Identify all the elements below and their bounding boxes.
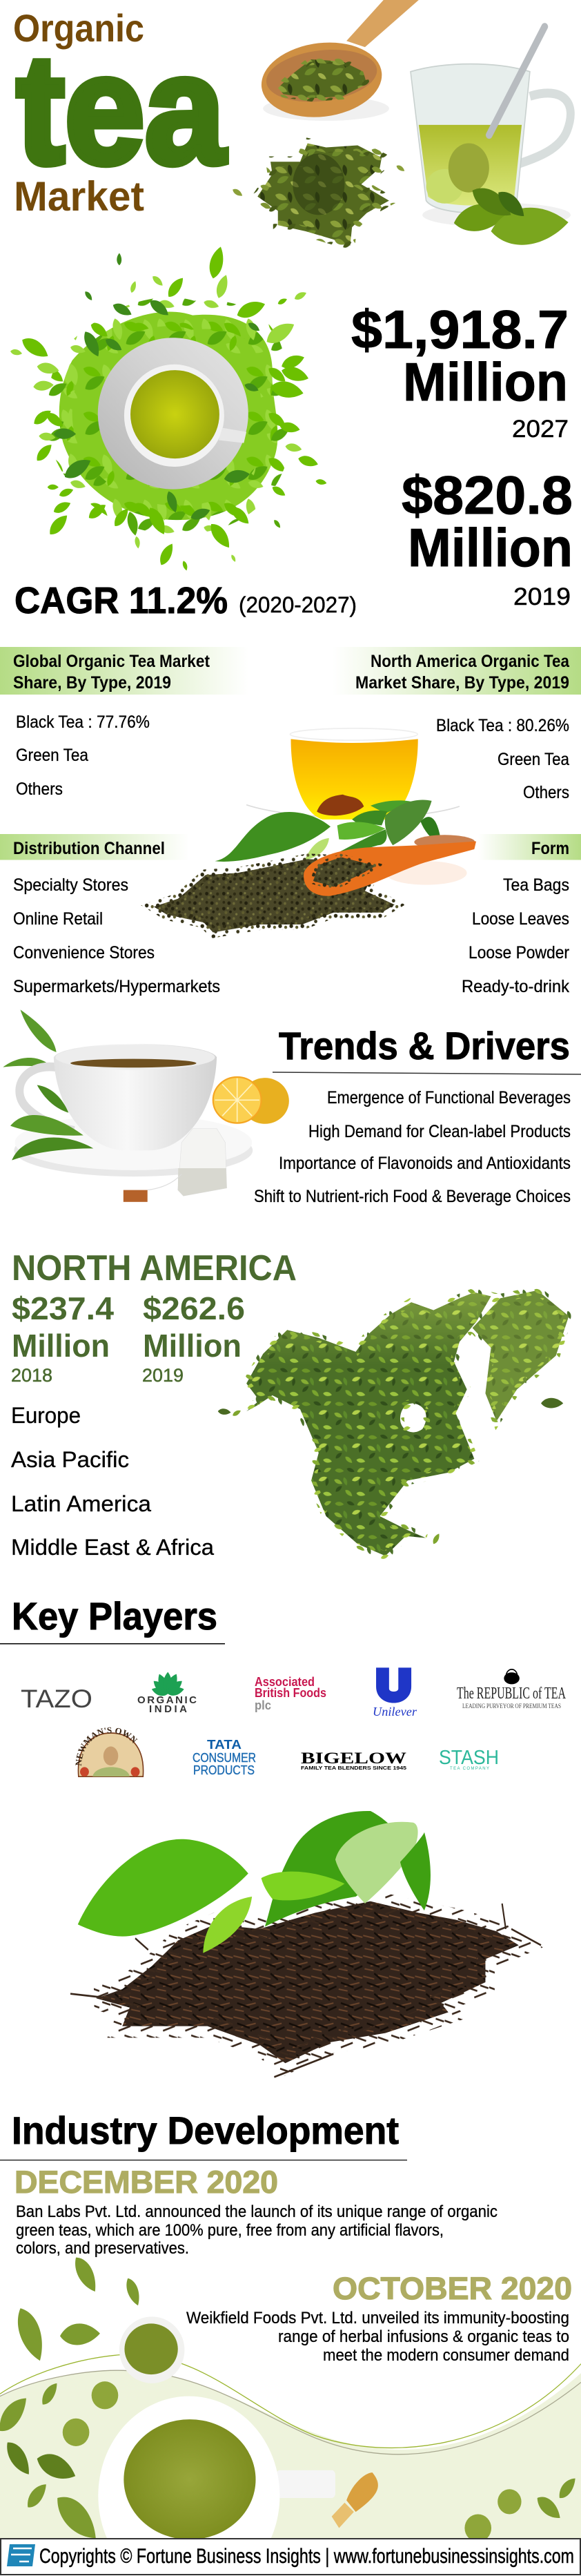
- panel: global share by type: Others: [16, 779, 63, 799]
- panel: global share by type: Global Organic Tea Market: [13, 652, 210, 671]
- illustration: matcha cup, leaves and whisk background: [0, 2252, 581, 2576]
- panel: distribution channel: Convenience Stores: [13, 943, 155, 962]
- list: other regions: Europe: [11, 1403, 81, 1428]
- development: October 2020: range of herbal infusions & organic teas to: [278, 2327, 569, 2346]
- panel: North America region values: 2018: [11, 1365, 52, 1386]
- illustration: black tea pile with fresh green leaves: [70, 1811, 541, 2077]
- panel: North America region values: 2019: [142, 1365, 184, 1386]
- stat: CAGR: CAGR 11.2%: [14, 580, 228, 621]
- panel: distribution channel: Supermarkets/Hypermarkets: [13, 977, 220, 996]
- logo: Stash: STASH: [439, 1747, 499, 1769]
- development: December 2020: Ban Labs Pvt. Ltd. announced the launch of its unique range of organic: [16, 2202, 498, 2221]
- title: Organic tea Market: Organic: [13, 6, 144, 50]
- panel: global share by type: [0, 647, 248, 799]
- list: other regions: [11, 1403, 214, 1560]
- panel: form: [462, 834, 581, 996]
- panel: form: Loose Powder: [469, 943, 569, 962]
- map: North America made of tea leaves: [217, 1290, 569, 1556]
- list: trends and drivers: [254, 1088, 571, 1206]
- list: other regions: Asia Pacific: [11, 1447, 129, 1472]
- logo: Associated British Foods: plc: [255, 1698, 271, 1712]
- panel: North America region values: $237.4: [12, 1290, 114, 1326]
- stat: 2019 market value: Million: [408, 517, 573, 578]
- stat: 2027 market value: 2027: [512, 416, 569, 443]
- logo: Associated British Foods: [255, 1675, 326, 1712]
- logo: Tata Consumer Products: PRODUCTS: [193, 1763, 255, 1777]
- panel: North America share by type: Others: [523, 783, 569, 802]
- panel: global share by type: Black Tea : 77.76%: [16, 713, 150, 732]
- heading: Industry Development: Industry Development: [12, 2109, 399, 2152]
- logo: TAZO: TAZO: [21, 1685, 92, 1713]
- title: Organic tea Market: Market: [14, 173, 144, 220]
- stat: 2027 market value: $1,918.7: [351, 299, 569, 360]
- illustration: white tea cup with lemon and tea bag: [3, 1009, 289, 1202]
- panel: North America region values: [11, 1248, 297, 1386]
- illustration: wooden spoon with loose green tea: [258, 0, 419, 124]
- logo: Newman's Own: [75, 1727, 144, 1777]
- logo: Bigelow: [301, 1750, 406, 1771]
- logo: Bigelow: BIGELOW: [301, 1750, 406, 1767]
- logo: Tata Consumer Products: CONSUMER: [193, 1751, 256, 1765]
- logo: Stash: TEA COMPANY: [450, 1767, 489, 1771]
- stat: 2019 market value: 2019: [513, 583, 571, 610]
- illustration: glass of green tea with spoon: [411, 27, 571, 249]
- heading: Key Players: Key Players: [12, 1594, 217, 1638]
- stat: 2027 market value: [351, 299, 569, 443]
- logo: Associated British Foods: British Foods: [255, 1686, 326, 1700]
- title: Organic tea Market: tea: [17, 22, 226, 196]
- list: other regions: Latin America: [11, 1491, 151, 1516]
- heading: Trends & Drivers: Trends & Drivers: [279, 1024, 570, 1067]
- development: December 2020: colors, and preservatives.: [16, 2239, 189, 2258]
- panel: North America share by type: Black Tea : 80.26%: [436, 716, 569, 735]
- stat: 2027 market value: Million: [403, 351, 568, 412]
- panel: form: Loose Leaves: [472, 909, 569, 929]
- illustration: tea bowl, leaves, scoop and rolled tea: [154, 728, 476, 932]
- footer: copyright bar: [1, 2539, 580, 2575]
- logo: The Republic of Tea: [457, 1669, 566, 1710]
- panel: form: Form: [531, 839, 569, 858]
- logo: Bigelow: FAMILY TEA BLENDERS SINCE 1945: [301, 1766, 406, 1771]
- stat: 2019 market value: [402, 465, 573, 610]
- logo: The Republic of Tea: LEADING PURVEYOR OF PREMIUM TEAS: [462, 1703, 561, 1710]
- panel: North America region values: Million: [12, 1328, 110, 1364]
- logo: Tata Consumer Products: [193, 1738, 256, 1777]
- panel: North America share by type: Market Share, By Type, 2019: [355, 673, 569, 693]
- development: December 2020: [14, 2165, 498, 2258]
- logo: Organic India: ORGANIC: [137, 1694, 197, 1706]
- logo: Associated British Foods: Associated: [255, 1675, 315, 1689]
- development: October 2020: OCTOBER 2020: [333, 2271, 572, 2306]
- list: other regions: Middle East & Africa: [11, 1535, 214, 1560]
- logo: Organic India: [137, 1672, 197, 1715]
- stat: CAGR: [14, 580, 357, 621]
- logo: Unilever: Unilever: [373, 1705, 417, 1718]
- stat: 2019 market value: $820.8: [402, 465, 573, 525]
- illustration: pile of green tea leaves: [232, 144, 406, 246]
- logo: Newman's Own: NEWMAN'S OWN: [75, 1727, 138, 1766]
- logo: Tata Consumer Products: TATA: [207, 1738, 242, 1752]
- panel: distribution channel: Online Retail: [13, 909, 103, 929]
- logo: Organic India: INDIA: [149, 1703, 187, 1715]
- development: December 2020: green teas, which are 100% pure, free from any artificial flavors,: [16, 2221, 444, 2240]
- development: October 2020: [186, 2271, 572, 2365]
- panel: distribution channel: Distribution Channel: [13, 839, 165, 858]
- panel: global share by type: Share, By Type, 2019: [13, 673, 171, 693]
- panel: North America share by type: [333, 647, 581, 802]
- panel: distribution channel: Specialty Stores: [13, 875, 128, 895]
- panel: North America region values: NORTH AMERICA: [12, 1248, 297, 1288]
- development: December 2020: DECEMBER 2020: [14, 2165, 278, 2200]
- panel: North America region values: $262.6: [143, 1290, 245, 1326]
- panel: global share by type: Green Tea: [16, 746, 88, 765]
- panel: form: Ready-to-drink: [462, 977, 569, 996]
- logo: Unilever: [373, 1667, 417, 1718]
- illustration: tea cup on a burst of green leaves: [10, 245, 327, 571]
- stat: CAGR: (2020-2027): [239, 592, 357, 617]
- panel: North America region values: Million: [143, 1328, 242, 1364]
- panel: North America share by type: Green Tea: [498, 750, 569, 769]
- panel: form: Tea Bags: [503, 875, 569, 895]
- panel: distribution channel: [0, 834, 220, 996]
